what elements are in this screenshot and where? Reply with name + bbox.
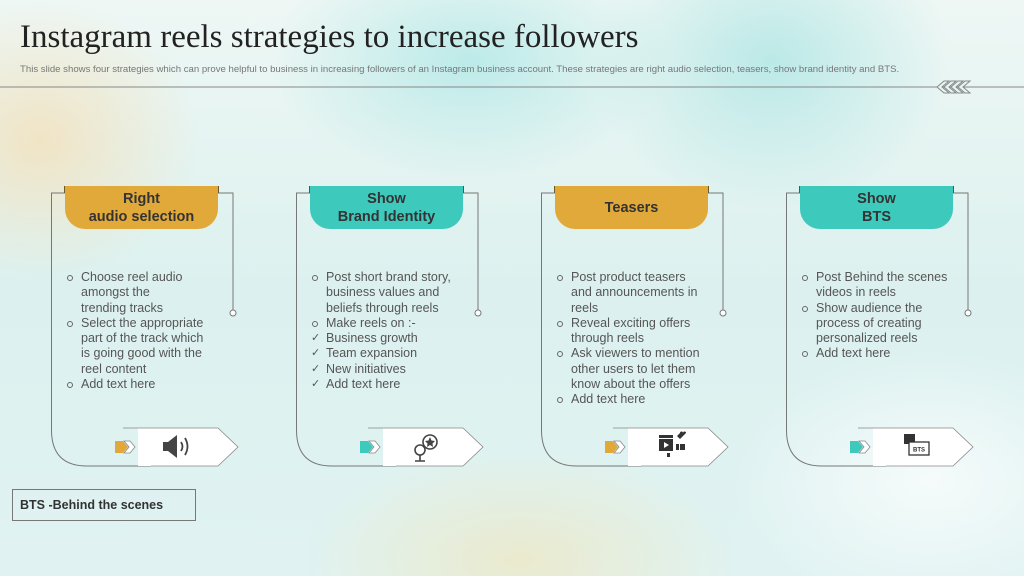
text: Add text here	[571, 392, 645, 406]
text	[67, 270, 203, 391]
text: Team expansion	[326, 346, 417, 360]
panel: teasers	[541, 186, 728, 466]
text: Post Behind the scenes videos in reels	[816, 270, 947, 299]
panel: show brand identity	[296, 186, 484, 466]
text: Add text here	[326, 377, 400, 391]
heading: BTS	[862, 208, 891, 224]
text: trending tracks	[81, 301, 163, 315]
icon: photo film BTS	[904, 434, 929, 455]
heading	[800, 186, 953, 229]
text: Select the appropriate part of the track which is going good with the reel content	[81, 316, 203, 376]
heading: Teasers	[605, 200, 658, 216]
text: Add text here	[816, 346, 890, 360]
heading: Show	[857, 190, 896, 206]
panel: show BTS	[786, 186, 974, 466]
text: Make reels on :-	[326, 316, 416, 330]
heading: Brand Identity	[338, 208, 435, 224]
header rule with arrows	[0, 80, 1024, 94]
note box: BTS definition: BTS -Behind the scenes	[20, 498, 163, 512]
subtitle: This slide shows four strategies which can prove helpful to business in increasing followers of an Instagram business account. These strategies are right audio selection, teasers, show brand identity and BTS.	[20, 64, 899, 75]
icon: speaker	[163, 435, 188, 458]
text: Add text here	[81, 377, 155, 391]
text: Business growth	[326, 331, 418, 345]
heading: Right	[123, 190, 160, 206]
heading	[65, 186, 218, 229]
text	[312, 270, 451, 391]
text: Reveal exciting offers through reels	[571, 316, 690, 345]
text: Ask viewers to mention other users to let them know about the offers	[571, 346, 700, 391]
icon: clapper video	[659, 432, 686, 457]
heading: audio selection	[89, 208, 194, 224]
text: Post short brand story, business values and beliefs through reels	[326, 270, 451, 315]
icon: location star	[415, 435, 437, 461]
icon: photo film BTS: BTS	[913, 448, 925, 454]
heading: Show	[367, 190, 406, 206]
text: New initiatives	[326, 362, 406, 376]
text	[557, 270, 700, 406]
heading	[555, 186, 708, 229]
title: Instagram reels strategies to increase followers	[20, 19, 639, 55]
text: Post product teasers and announcements in reels	[571, 270, 697, 315]
note box: BTS definition	[12, 489, 196, 521]
text: Choose reel audio amongst the	[81, 270, 182, 299]
panel: right audio selection	[51, 186, 238, 466]
text: Show audience the process of creating personalized reels	[816, 301, 922, 345]
heading	[310, 186, 463, 229]
text	[802, 270, 947, 360]
